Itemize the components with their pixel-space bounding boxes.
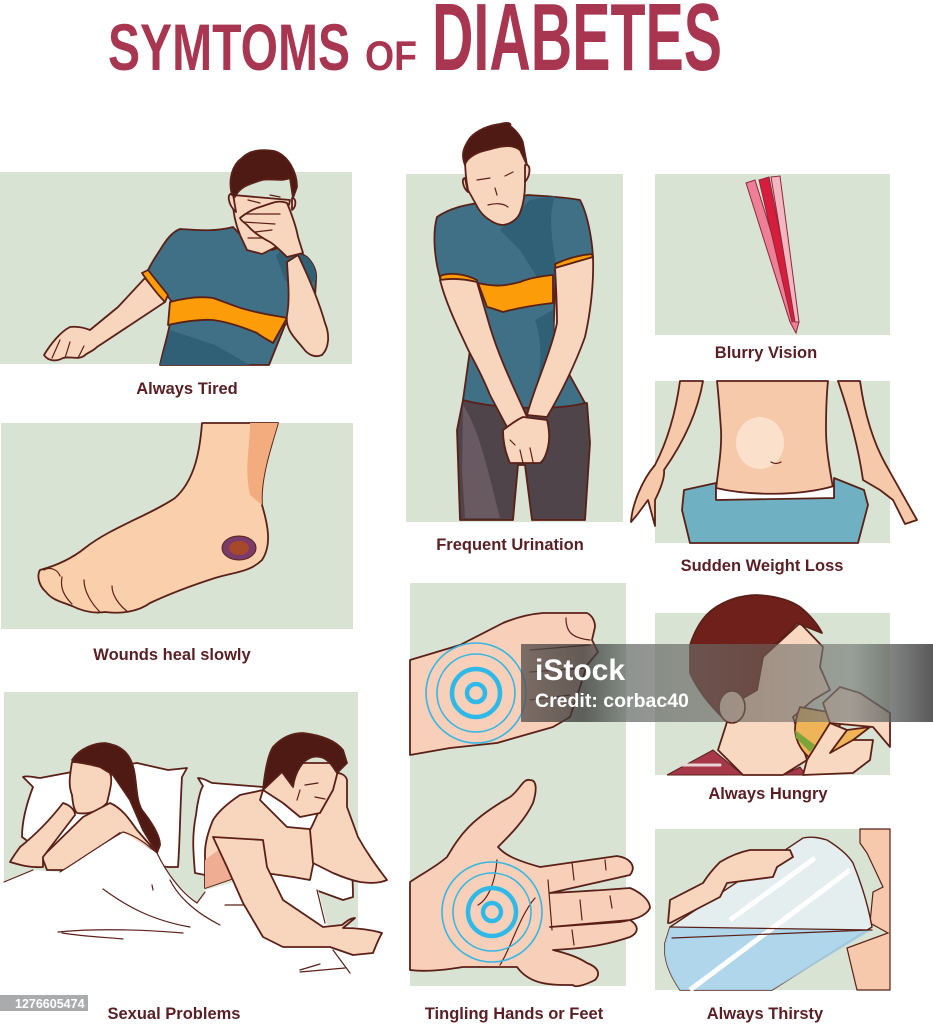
caption: always hungry: Always Hungry	[708, 785, 828, 803]
watermark text: Credit: corbac40	[535, 690, 689, 712]
icon: upper hand	[410, 613, 598, 755]
icon: foot with wound	[38, 423, 278, 613]
title	[108, 0, 722, 91]
panel: tingling hands	[410, 583, 650, 986]
caption: blurry vision: Blurry Vision	[715, 344, 817, 362]
panel: sexual problems	[0, 692, 387, 975]
icon: loose jeans torso	[631, 381, 917, 543]
caption: frequent urination: Frequent Urination	[436, 536, 584, 554]
icon: lower hand	[410, 780, 650, 986]
icon: man eating burger	[667, 595, 890, 775]
caption: sexual problems: Sexual Problems	[108, 1005, 240, 1023]
icon: couple in bed	[0, 733, 387, 975]
icon: test strips	[746, 176, 799, 333]
panel: blurry vision	[655, 174, 890, 335]
caption: always thirsty: Always Thirsty	[707, 1005, 824, 1023]
title: OF	[365, 32, 417, 79]
title: SYMTOMS	[108, 10, 350, 84]
panel: wounds heal slowly	[1, 423, 353, 629]
caption: wounds heal slowly: Wounds heal slowly	[93, 646, 252, 664]
caption: tingling hands: Tingling Hands or Feet	[425, 1005, 604, 1023]
watermark text: iStock	[535, 654, 625, 687]
icon: face drinking	[665, 829, 890, 990]
caption: sudden weight loss: Sudden Weight Loss	[681, 557, 843, 575]
panel: always tired	[0, 150, 352, 365]
panel: always hungry	[655, 595, 890, 775]
panel: always thirsty	[655, 829, 890, 990]
caption: always tired: Always Tired	[136, 380, 238, 398]
panel: frequent urination	[406, 123, 623, 522]
watermark id	[0, 995, 88, 1011]
watermark text	[535, 654, 689, 712]
watermark id: 1276605474	[15, 997, 85, 1011]
watermark band	[521, 644, 933, 722]
icon: standing man	[434, 123, 593, 520]
icon: tired man	[44, 150, 328, 365]
panel: sudden weight loss	[631, 381, 917, 543]
